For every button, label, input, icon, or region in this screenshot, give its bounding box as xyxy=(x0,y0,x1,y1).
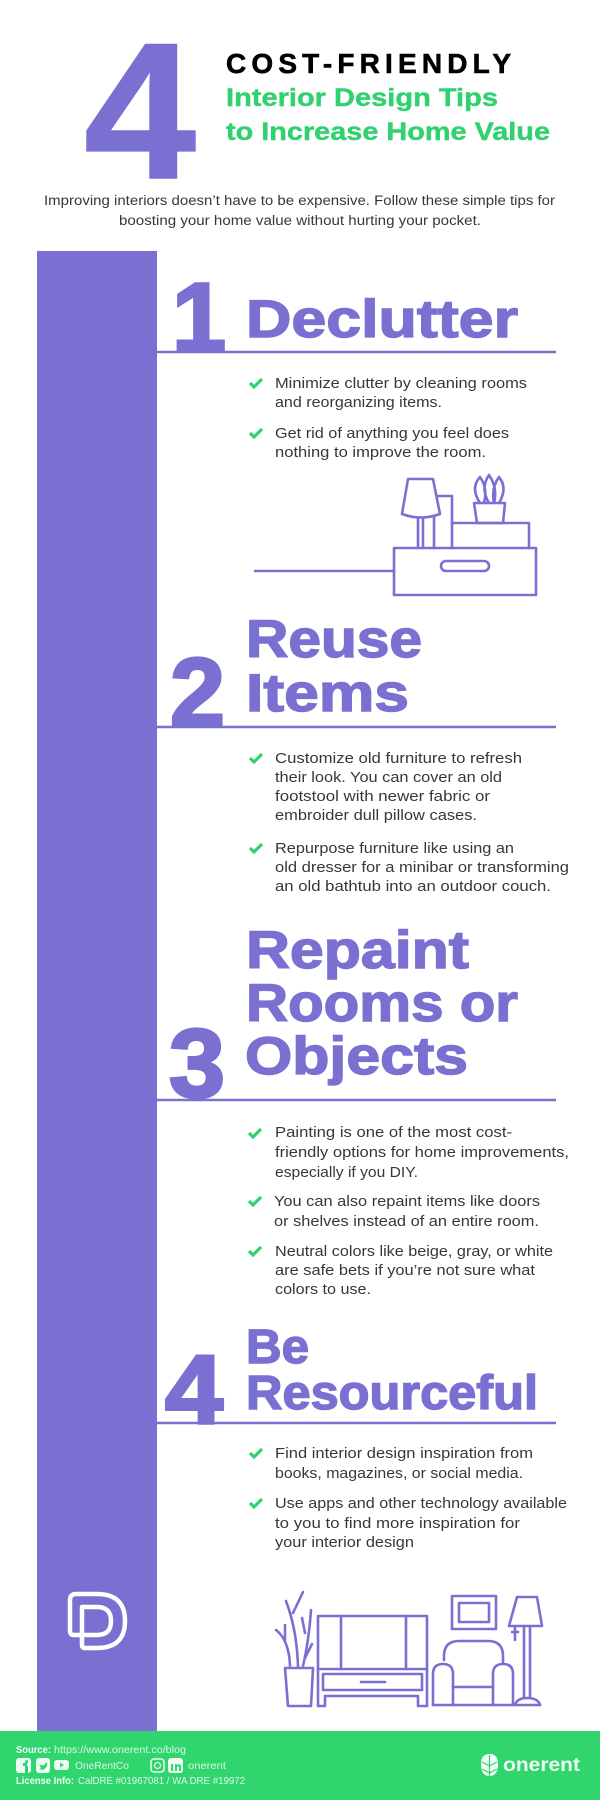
bullet: painting xyxy=(249,1124,569,1181)
bullet: repaint items: You can also repaint items like doors xyxy=(274,1193,540,1210)
bullet: minimize clutter xyxy=(250,375,527,411)
heading: reuse items xyxy=(246,610,422,723)
bullet: use apps: Use apps and other technology available xyxy=(275,1495,567,1512)
bullet: use apps: your interior design xyxy=(275,1534,414,1551)
license line xyxy=(16,1775,245,1787)
number 3: 3 xyxy=(169,1009,225,1118)
heading: declutter: Declutter xyxy=(246,290,518,349)
social icons: facebook twitter youtube xyxy=(16,1758,69,1773)
title block xyxy=(84,3,550,220)
bullet: minimize clutter: Minimize clutter by cleaning rooms xyxy=(275,375,527,392)
heading: be resourceful: Resourceful xyxy=(246,1367,538,1420)
bullet: neutral colors: are safe bets if you’re not sure what xyxy=(275,1262,536,1279)
heading: repaint rooms or objects: Rooms or xyxy=(246,974,518,1033)
big number 4: 4 xyxy=(84,3,196,220)
bullet: repurpose furniture: Repurpose furniture like using an xyxy=(275,840,514,857)
bullet: repurpose furniture xyxy=(250,840,569,895)
heading: be resourceful: Be xyxy=(246,1321,309,1374)
logo: D mark xyxy=(70,1594,125,1648)
intro text xyxy=(44,193,556,228)
bullet: neutral colors: colors to use. xyxy=(275,1281,371,1298)
heading: cost-friendly: COST-FRIENDLY xyxy=(226,48,511,79)
bullet: use apps xyxy=(250,1495,567,1551)
purple side bar xyxy=(37,251,157,1731)
bullet: find inspiration xyxy=(250,1445,533,1482)
heading: be resourceful xyxy=(246,1321,538,1420)
license line: CalDRE #01967081 / WA DRE #19972 xyxy=(78,1775,245,1787)
bullet: get rid: nothing to improve the room. xyxy=(275,444,486,461)
section 1: declutter xyxy=(157,263,556,595)
heading: reuse items: Reuse xyxy=(246,610,422,669)
bullet: painting: Painting is one of the most cost- xyxy=(275,1124,512,1141)
heading: repaint rooms or objects xyxy=(245,921,518,1086)
social handle: OneRentCo: OneRentCo xyxy=(75,1760,129,1772)
subheading: increase home value: to Increase Home Value xyxy=(226,118,550,146)
logo: onerent: onerent xyxy=(503,1755,581,1776)
bullet: painting: friendly options for home improvements, xyxy=(275,1144,569,1161)
bullet: customize furniture: their look. You can cover an old xyxy=(275,769,502,786)
number 2: 2 xyxy=(170,638,225,747)
bullet: get rid: Get rid of anything you feel does xyxy=(275,425,509,442)
bullet: customize furniture: Customize old furniture to refresh xyxy=(275,750,522,767)
icon: side table with lamp and plant xyxy=(255,475,536,595)
bullet: neutral colors: Neutral colors like beige, gray, or white xyxy=(275,1243,553,1260)
bullet: get rid xyxy=(250,425,509,461)
social handle: onerent: onerent xyxy=(188,1760,226,1772)
bullet: repurpose furniture: an old bathtub into an outdoor couch. xyxy=(275,878,551,895)
bullet: repaint items xyxy=(249,1193,540,1230)
bullet: find inspiration: books, magazines, or social media. xyxy=(275,1465,523,1482)
heading: repaint rooms or objects: Objects xyxy=(245,1027,468,1086)
bullet: repurpose furniture: old dresser for a minibar or transforming xyxy=(275,859,569,876)
subheading: interior design tips: Interior Design Tips xyxy=(226,84,498,112)
heading: repaint rooms or objects: Repaint xyxy=(246,921,469,980)
number 1: 1 xyxy=(172,263,226,372)
number 4: 4 xyxy=(165,1335,223,1444)
bullet: customize furniture: footstool with newer fabric or xyxy=(275,788,490,805)
section 2: reuse items xyxy=(157,610,569,895)
bullet: minimize clutter: and reorganizing items. xyxy=(275,394,442,411)
section 3: repaint rooms or objects xyxy=(157,921,569,1298)
section 4: be resourceful xyxy=(157,1321,567,1706)
source line: https://www.onerent.co/blog xyxy=(54,1744,186,1756)
bullet: customize furniture xyxy=(250,750,522,824)
logo: onerent xyxy=(481,1754,581,1776)
bullet: repaint items: or shelves instead of an entire room. xyxy=(274,1213,539,1230)
source line: Source: xyxy=(16,1744,51,1756)
intro text: boosting your home value without hurting your pocket. xyxy=(119,213,481,228)
bullet: customize furniture: embroider dull pillow cases. xyxy=(275,807,477,824)
bullet: use apps: to you to find more inspiration for xyxy=(275,1515,520,1532)
license line: License Info: xyxy=(16,1775,74,1787)
heading: reuse items: Items xyxy=(246,664,409,723)
bullet: painting: especially if you DIY. xyxy=(275,1164,418,1181)
footer bar xyxy=(0,1731,600,1800)
icon: living room furniture xyxy=(276,1592,542,1706)
bullet: neutral colors xyxy=(249,1243,553,1298)
bullet: find inspiration: Find interior design inspiration from xyxy=(275,1445,533,1462)
intro text: Improving interiors doesn’t have to be expensive. Follow these simple tips for xyxy=(44,193,556,208)
social icons: instagram linkedin xyxy=(151,1758,183,1773)
